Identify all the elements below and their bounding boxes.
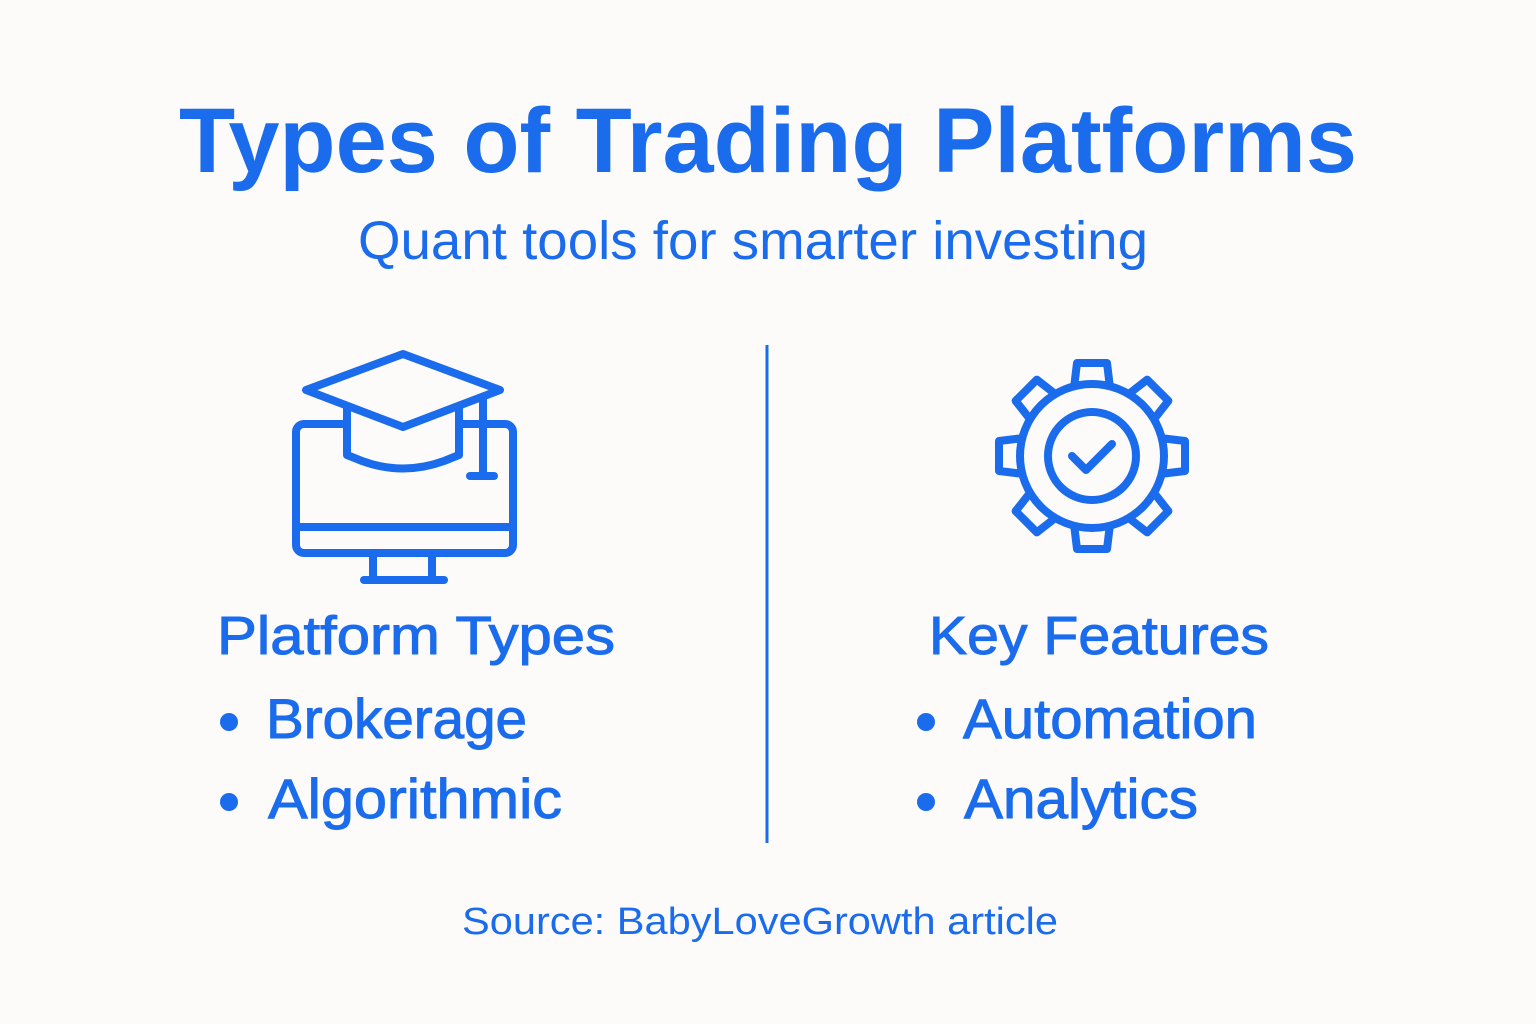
subtitle: Quant tools for smarter investing — [358, 211, 1148, 271]
panel: platform types: Brokerage — [266, 687, 527, 750]
divider — [766, 345, 768, 843]
title: Types of Trading Platforms — [179, 90, 1357, 192]
icon: gear with check — [999, 363, 1185, 549]
panel: platform types — [217, 606, 615, 830]
panel: key features: Analytics — [964, 767, 1198, 830]
panel: key features — [917, 606, 1269, 830]
panel: key features: Key Features — [929, 606, 1269, 666]
panel: platform types: Algorithmic — [268, 767, 562, 830]
source: Source: BabyLoveGrowth article — [462, 901, 1058, 943]
panel: platform types: Platform Types — [217, 606, 615, 666]
icon: graduation cap on monitor — [296, 354, 513, 580]
panel: key features: Automation — [963, 687, 1257, 750]
